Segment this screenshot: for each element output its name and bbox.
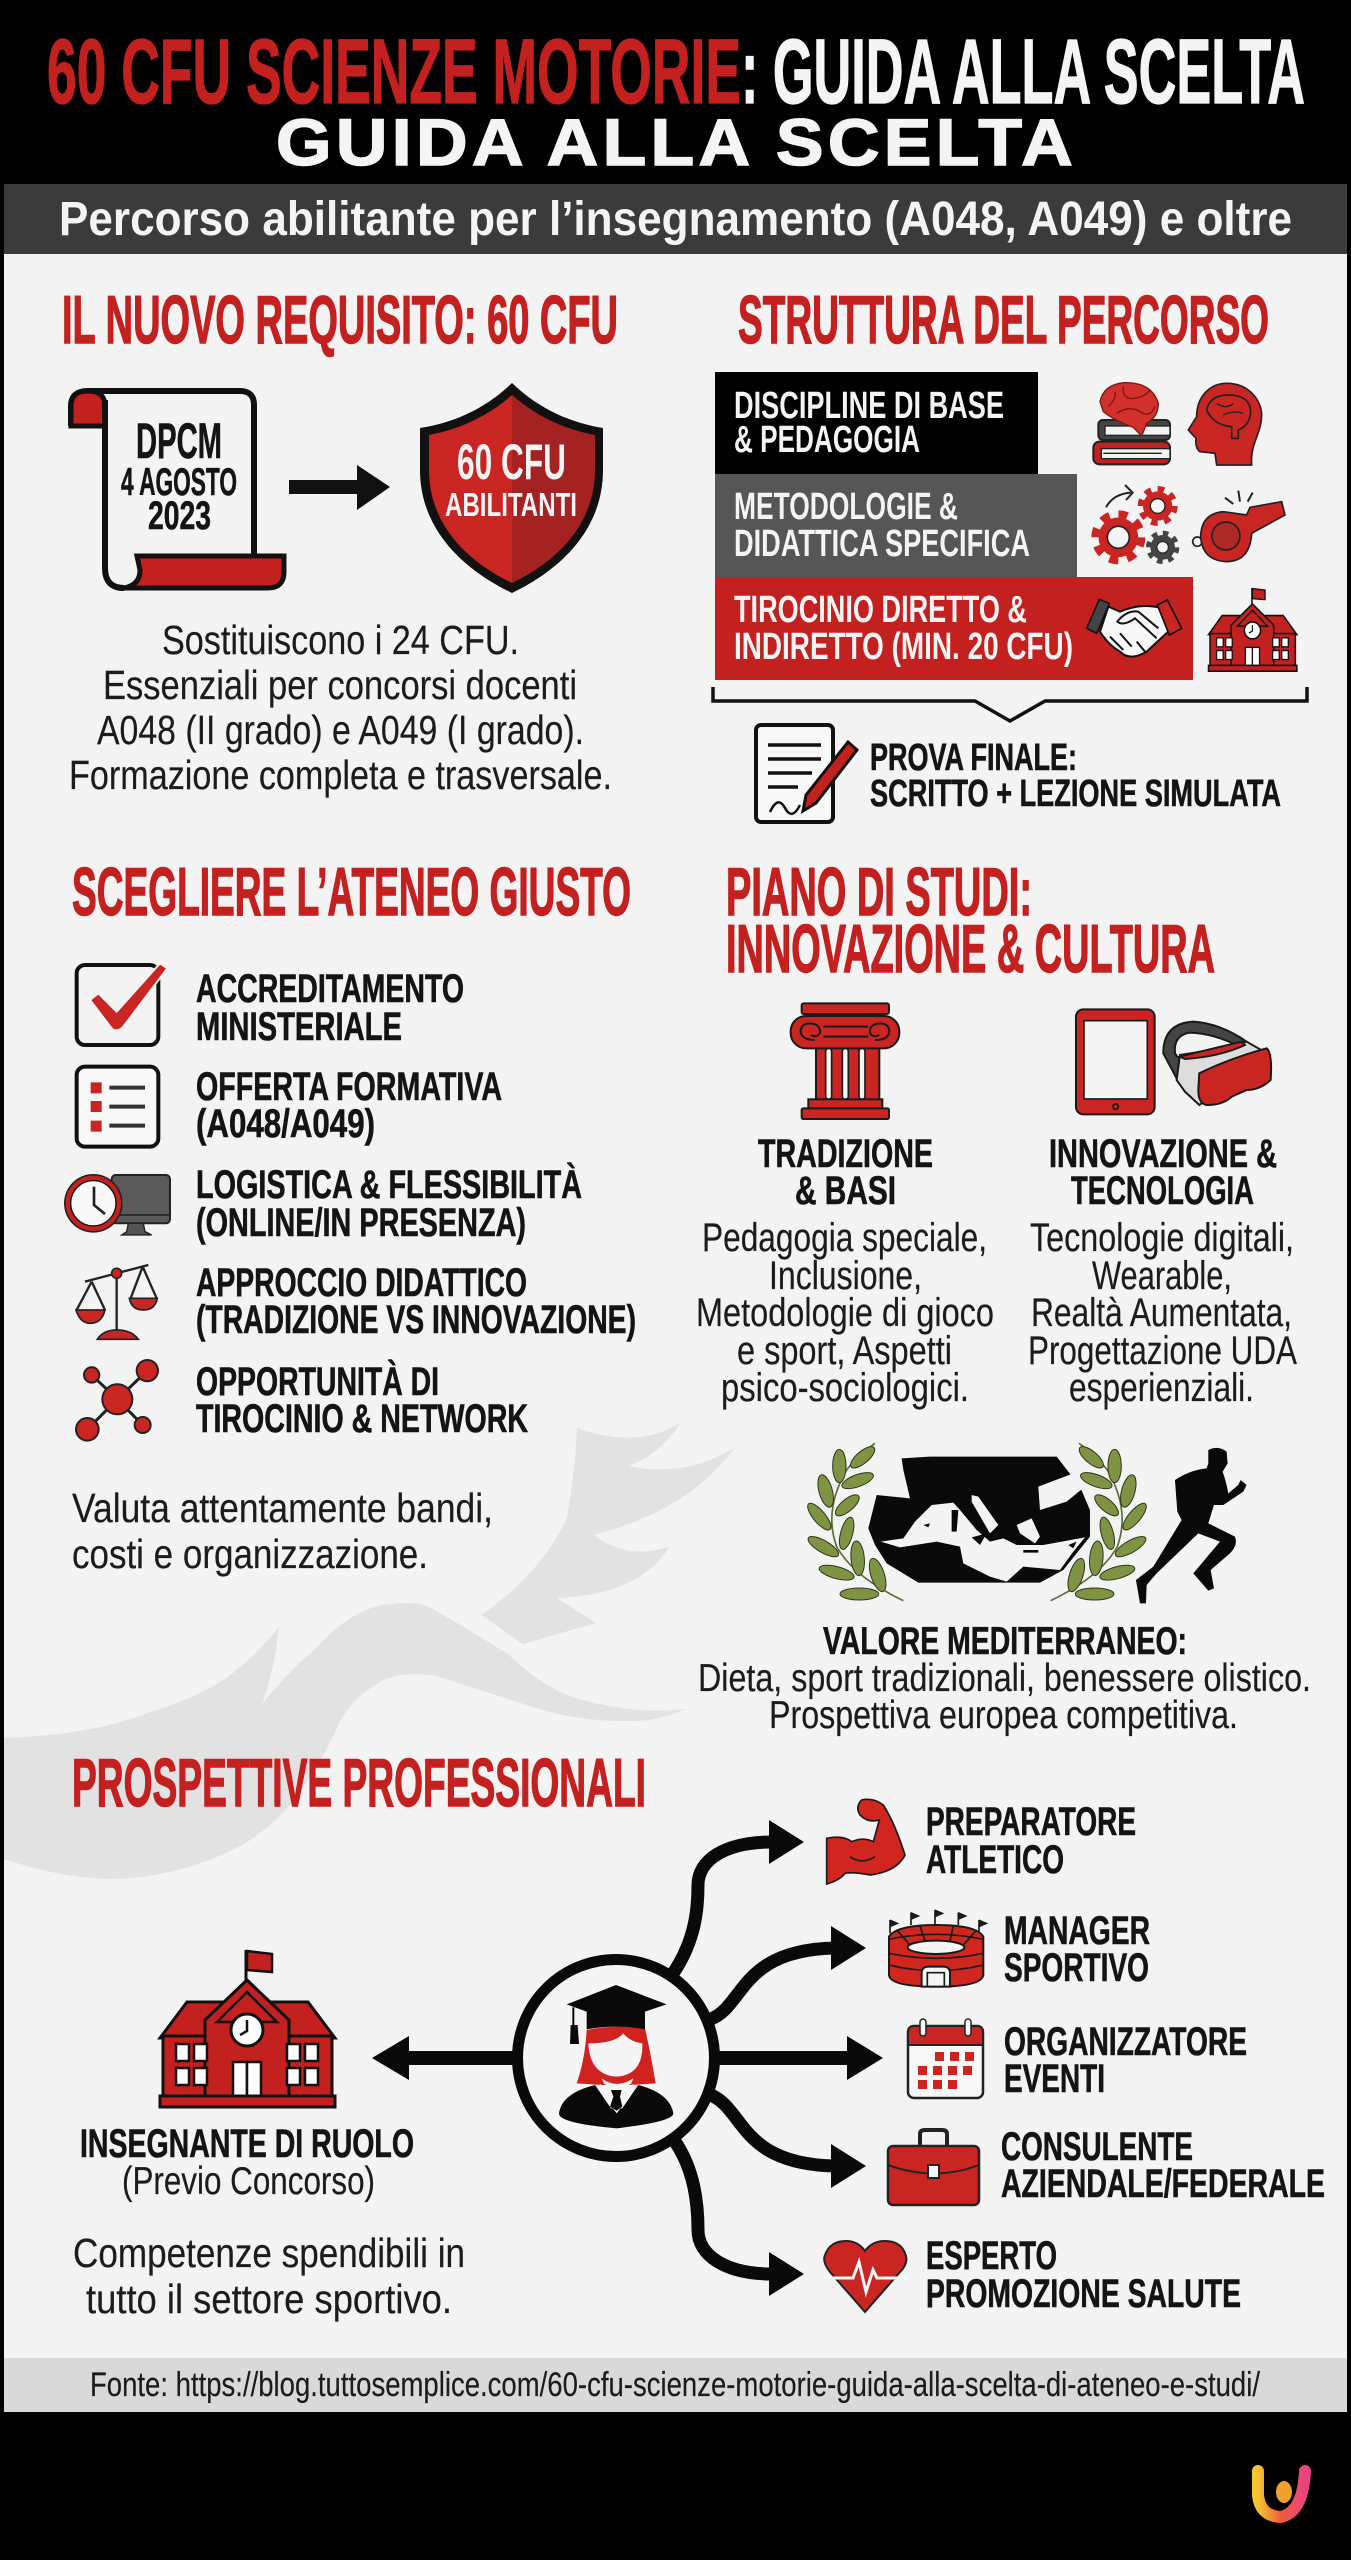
- title line one: 60 CFU SCIENZE MOTORIE: [47, 21, 741, 123]
- heading: prospettive professionali: PROSPETTIVE PROFESSIONALI: [72, 1745, 646, 1821]
- shield text: ABILITANTI: [445, 486, 577, 523]
- career: manager sportivo: [889, 1909, 1150, 1990]
- list item: logistica: LOGISTICA & FLESSIBILITÀ: [196, 1162, 582, 1207]
- icon: brain on books: [1093, 383, 1170, 464]
- header band: [47, 21, 1305, 179]
- list item: accreditamento: ACCREDITAMENTO: [196, 967, 464, 1011]
- label: tradizione e basi: & BASI: [795, 1169, 896, 1213]
- icon: handshake: [1087, 599, 1182, 657]
- text: insegnante di ruolo: [80, 2122, 414, 2203]
- text: tradizione: e sport, Aspetti: [737, 1329, 952, 1373]
- career: organizzatore eventi: EVENTI: [1004, 2057, 1105, 2101]
- arrow: to consultant: [711, 2095, 866, 2188]
- watermark: grey wing: [4, 1422, 734, 1879]
- career: manager sportivo: MANAGER: [1004, 1909, 1150, 1953]
- icon: calendar: [908, 2019, 983, 2098]
- text: prova finale: [870, 737, 1281, 815]
- text block: requisito: [69, 617, 612, 798]
- bar: discipline di base: & PEDAGOGIA: [734, 419, 920, 461]
- icon: flexed arm: [827, 1799, 905, 1884]
- icon: graduate in circle: [518, 1960, 714, 2156]
- career: preparatore atletico: ATLETICO: [926, 1838, 1064, 1882]
- icon: mediterranean map: [868, 1457, 1090, 1583]
- text: valore mediterraneo: VALORE MEDITERRANEO:: [823, 1620, 1187, 1663]
- icon: laurel left: [804, 1443, 903, 1601]
- list item: tirocinio e network: OPPORTUNITÀ DI: [196, 1359, 439, 1404]
- icon: network: [76, 1360, 158, 1441]
- list item: offerta formativa: [77, 1065, 502, 1147]
- icon: gears: [1096, 485, 1177, 561]
- scroll text: 4 AGOSTO: [121, 461, 237, 504]
- arrow: scroll to shield: [289, 465, 390, 510]
- career: esperto promozione salute: [823, 2234, 1241, 2316]
- arrow: to trainer: [674, 1820, 804, 1972]
- list item: approccio didattico: APPROCCIO DIDATTICO: [196, 1261, 527, 1305]
- scroll text: [121, 413, 237, 538]
- text: tradizione: Pedagogia speciale,: [702, 1216, 987, 1260]
- heading: il nuovo requisito: IL NUOVO REQUISITO: 60 CFU: [62, 282, 618, 358]
- text: tradizione: Inclusione,: [769, 1254, 922, 1298]
- career: consulente: [888, 2125, 1325, 2206]
- text: valuta bandi: Valuta attentamente bandi,: [72, 1485, 493, 1531]
- list item: accreditamento: [77, 963, 464, 1049]
- career: preparatore atletico: PREPARATORE: [926, 1800, 1136, 1844]
- heading: piano di studi: PIANO DI STUDI:: [726, 854, 1032, 930]
- icon: whistle: [1193, 491, 1285, 562]
- career: esperto promozione salute: ESPERTO: [926, 2234, 1057, 2278]
- text block: requisito: Formazione completa e trasversale.: [69, 752, 612, 798]
- icon: column: [791, 1003, 899, 1119]
- scroll text: DPCM: [136, 413, 222, 469]
- shield text: 60 CFU: [457, 434, 566, 490]
- list item: approccio didattico: [76, 1261, 636, 1342]
- heading: piano di studi: [726, 854, 1215, 987]
- text: prova finale: PROVA FINALE:: [870, 737, 1077, 779]
- text: valore mediterraneo: [698, 1620, 1311, 1737]
- list item: accreditamento: MINISTERIALE: [196, 1005, 402, 1049]
- icon: large school: [160, 1950, 335, 2107]
- icon: small school: [1209, 588, 1297, 671]
- bar: discipline di base: DISCIPLINE DI BASE: [734, 385, 1004, 427]
- text: tradizione: Metodologie di gioco: [696, 1291, 994, 1335]
- text: innovazione: Wearable,: [1092, 1254, 1232, 1298]
- footer source band: [4, 2358, 1347, 2412]
- text: insegnante di ruolo: INSEGNANTE DI RUOLO: [80, 2122, 414, 2166]
- text: tradizione: [696, 1216, 994, 1410]
- text: tradizione: psico-sociologici.: [721, 1366, 969, 1410]
- icon: laurel right: [1051, 1443, 1150, 1601]
- icon: checklist: [77, 1067, 158, 1147]
- text: valuta bandi: [72, 1485, 493, 1577]
- icon: runner: [1136, 1448, 1247, 1603]
- icon: logo: [1258, 2471, 1305, 2517]
- career: organizzatore eventi: ORGANIZZATORE: [1004, 2020, 1247, 2064]
- bar: metodologie: METODOLOGIE &: [734, 486, 958, 528]
- list item: logistica: (ONLINE/IN PRESENZA): [196, 1201, 526, 1245]
- text: innovazione: Realtà Aumentata,: [1031, 1291, 1292, 1335]
- list item: tirocinio e network: [76, 1359, 528, 1441]
- label: innovazione e tecnologia: TECNOLOGIA: [1071, 1169, 1254, 1213]
- arrow: to organizer: [719, 2036, 883, 2080]
- text: insegnante di ruolo: (Previo Concorso): [122, 2160, 375, 2203]
- icon: exam paper and pen: [756, 725, 857, 822]
- icon: heart pulse: [823, 2241, 907, 2312]
- list item: logistica: [64, 1162, 582, 1245]
- bar: tirocinio: TIROCINIO DIRETTO &: [734, 589, 1027, 631]
- icon: clock and monitor: [64, 1174, 170, 1235]
- icon: VR headset: [1163, 1022, 1271, 1105]
- icon: scales: [76, 1265, 157, 1339]
- list item: offerta formativa: OFFERTA FORMATIVA: [196, 1065, 502, 1109]
- bar: discipline di base: [715, 372, 1038, 474]
- bracket: [713, 687, 1307, 721]
- text: valore mediterraneo: Prospettiva europea competitiva.: [769, 1694, 1238, 1737]
- career: organizzatore eventi: [908, 2019, 1247, 2101]
- icon: DPCM scroll: [71, 391, 284, 588]
- icon: briefcase: [888, 2130, 979, 2205]
- text: competenze spendibili: [73, 2230, 465, 2322]
- text: innovazione: esperienziali.: [1069, 1366, 1254, 1410]
- label: innovazione e tecnologia: [1049, 1132, 1277, 1213]
- heading: scegliere ateneo: SCEGLIERE L’ATENEO GIUSTO: [72, 854, 631, 930]
- arrow: to health expert: [674, 2140, 804, 2296]
- list item: approccio didattico: (TRADIZIONE VS INNOVAZIONE): [196, 1298, 636, 1342]
- label: tradizione e basi: [758, 1132, 933, 1213]
- list item: tirocinio e network: TIROCINIO & NETWORK: [196, 1397, 528, 1441]
- label: tradizione e basi: TRADIZIONE: [758, 1132, 933, 1176]
- icon: head with brain: [1188, 383, 1262, 465]
- scroll text: 2023: [148, 494, 211, 538]
- arrow: to manager: [711, 1926, 866, 2019]
- text: valuta bandi: costi e organizzazione.: [72, 1531, 428, 1577]
- bar: metodologie: DIDATTICA SPECIFICA: [734, 523, 1030, 565]
- bar: tirocinio: INDIRETTO (MIN. 20 CFU): [734, 626, 1073, 668]
- text: innovazione: [1028, 1216, 1297, 1410]
- text: innovazione: Tecnologie digitali,: [1030, 1216, 1294, 1260]
- text block: requisito: A048 (II grado) e A049 (I grado).: [97, 707, 584, 753]
- arrow: to teacher: [372, 2036, 513, 2080]
- icon: checkbox: [77, 963, 167, 1045]
- text block: requisito: Essenziali per concorsi docenti: [103, 662, 577, 708]
- text block: requisito: Sostituiscono i 24 CFU.: [162, 617, 519, 663]
- bar: tirocinio: [715, 577, 1193, 680]
- icon: tablet: [1076, 1009, 1155, 1114]
- icon: stadium: [889, 1909, 988, 1987]
- text: competenze spendibili: Competenze spendibili in: [73, 2230, 465, 2276]
- title line two: GUIDA ALLA SCELTA: [276, 105, 1077, 179]
- icon: shield 60 CFU: [420, 383, 603, 593]
- career: manager sportivo: SPORTIVO: [1004, 1946, 1149, 1990]
- bar: metodologie: [715, 474, 1077, 577]
- shield text: [445, 434, 577, 523]
- list item: offerta formativa: (A048/A049): [196, 1102, 375, 1146]
- career: consulente: CONSULENTE: [1001, 2125, 1193, 2169]
- text: competenze spendibili: tutto il settore sportivo.: [86, 2276, 452, 2322]
- career: preparatore atletico: [827, 1799, 1136, 1884]
